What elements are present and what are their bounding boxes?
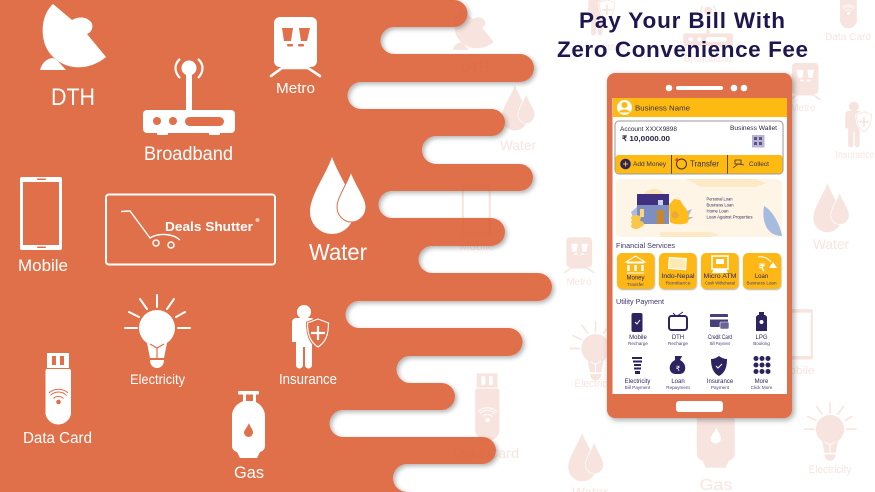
watermark: Mobile centre bbox=[460, 185, 494, 253]
Deals Shutter logo box bbox=[106, 194, 275, 264]
watermark: DTH: DTH bbox=[461, 59, 489, 76]
tile: micro ATM: Micro ATM bbox=[704, 274, 736, 280]
tile: indo-nepal remittance: Remittance bbox=[666, 280, 691, 286]
utility: insurance payment: Payment bbox=[711, 385, 730, 390]
app header bbox=[613, 98, 787, 117]
watermark: Water right bbox=[813, 183, 849, 252]
watermark: Electricity right: Electricity bbox=[808, 464, 852, 476]
title: Pay Your Bill With bbox=[579, 8, 785, 33]
coins illustration bbox=[631, 215, 644, 229]
utility: electricity bill payment bbox=[625, 357, 651, 390]
tile: money transfer bbox=[617, 253, 654, 289]
watermark: Insurance top bbox=[586, 0, 625, 53]
utility: loan repayment: Repayment bbox=[666, 385, 690, 390]
watermark: DTH bbox=[453, 9, 494, 76]
Electricity icon and label: Electricity bbox=[130, 371, 185, 387]
Broadband icon and label bbox=[143, 59, 235, 165]
utility: loan repayment: Loan bbox=[671, 379, 685, 385]
utility: DTH recharge: DTH bbox=[672, 335, 684, 341]
tile: money transfer: Transfer bbox=[627, 282, 644, 287]
utility: mobile recharge: Recharge bbox=[628, 341, 648, 346]
watermark: Data Card right bbox=[825, 0, 871, 43]
utility: LPG booking: Booking bbox=[753, 341, 770, 346]
watermark: Water lower bbox=[568, 433, 608, 492]
watermark: Data Card centre: Data Card bbox=[453, 445, 519, 461]
Mobile icon and label bbox=[18, 177, 68, 275]
QR code bbox=[752, 135, 764, 148]
watermark: Data Card right: Data Card bbox=[825, 32, 871, 43]
loan banner bbox=[616, 179, 782, 237]
phone body bbox=[607, 73, 792, 418]
Electricity icon and label bbox=[125, 295, 190, 387]
Insurance icon and label bbox=[279, 305, 337, 388]
watermark: Insurance top: Insurance bbox=[586, 42, 625, 53]
Water icon and label bbox=[309, 157, 367, 265]
watermark: Water right: Water bbox=[813, 236, 849, 252]
wallet card: ₹ 10,0000.00 bbox=[622, 134, 670, 143]
tile: micro ATM: Cash Withdrawal bbox=[705, 280, 735, 286]
Deals Shutter logo box: Deals Shutter bbox=[165, 219, 253, 234]
tile: loan: ₹ bbox=[759, 263, 766, 274]
utility: credit card bill payment: Bill Payment bbox=[710, 341, 731, 346]
wallet card: Business Wallet bbox=[730, 126, 777, 132]
Broadband icon and label: Broadband bbox=[144, 144, 233, 165]
tile: loan: Business Loan bbox=[746, 280, 777, 286]
phone speaker and camera bbox=[666, 85, 747, 91]
Insurance icon and label: Insurance bbox=[279, 372, 337, 388]
phone screen bbox=[612, 98, 787, 394]
utility: electricity bill payment: Bill Payment bbox=[625, 385, 651, 390]
financial services heading: Financial Services bbox=[616, 241, 675, 250]
phone mockup bbox=[607, 73, 792, 418]
watermark: Metro right bbox=[790, 63, 820, 114]
watermark: Data Card centre bbox=[453, 373, 519, 461]
watermark: Metro centre: Metro bbox=[566, 277, 592, 288]
utility: LPG booking: LPG bbox=[755, 335, 768, 341]
tile: indo-nepal remittance: Indo-Nepal bbox=[662, 274, 694, 280]
utility: more: More bbox=[755, 379, 769, 385]
utility: mobile recharge: Mobile bbox=[629, 335, 647, 341]
transfer button: Transfer bbox=[690, 160, 719, 168]
leaf illustration bbox=[763, 206, 782, 236]
Metro icon and label: Metro bbox=[276, 80, 315, 97]
DTH icon and label bbox=[40, 4, 106, 111]
watermark: Electricity centre bbox=[570, 322, 622, 390]
tile: loan: Loan bbox=[755, 274, 768, 280]
utility: insurance payment bbox=[707, 356, 734, 390]
utility: DTH recharge: Recharge bbox=[668, 341, 688, 346]
Water icon and label: Water bbox=[309, 239, 367, 265]
title: Zero Convenience Fee bbox=[557, 37, 808, 62]
utility: LPG booking bbox=[753, 312, 770, 346]
collect button bbox=[733, 160, 769, 168]
wallet card bbox=[615, 121, 783, 174]
watermark: Metro centre bbox=[565, 237, 594, 288]
Metro icon and label bbox=[271, 17, 320, 97]
watermark: Mobile centre: Mobile bbox=[460, 241, 494, 253]
Data Card icon and label bbox=[23, 353, 92, 447]
watermark: Insurance right bbox=[836, 102, 875, 161]
Gas icon and label bbox=[232, 391, 265, 482]
watermark: Water upper bbox=[500, 85, 536, 153]
watermark: Mobile right bbox=[780, 309, 814, 377]
orange wavy panel bbox=[0, 0, 552, 492]
collect button: Collect bbox=[749, 161, 769, 168]
house illustration bbox=[637, 194, 669, 224]
money bag illustration bbox=[669, 199, 689, 224]
tile: indo-nepal remittance bbox=[659, 253, 696, 289]
tile: money transfer: Money bbox=[626, 276, 645, 282]
add money button bbox=[620, 159, 667, 169]
transfer button bbox=[675, 158, 719, 169]
loan types list bbox=[706, 196, 752, 220]
title bbox=[557, 8, 808, 62]
utility: DTH recharge bbox=[668, 312, 688, 346]
tile: micro ATM bbox=[701, 253, 738, 289]
loan types list: Personal Loan bbox=[706, 196, 733, 202]
faded background watermark icons bbox=[453, 0, 875, 492]
utility: loan repayment bbox=[666, 356, 690, 390]
watermark: Gas bbox=[697, 391, 735, 492]
utility: mobile recharge bbox=[628, 313, 648, 346]
loan types list: Business Loan bbox=[706, 202, 734, 208]
add money button: Add Money bbox=[633, 161, 667, 168]
utility: credit card bill payment: Credit Card bbox=[708, 335, 732, 341]
phone home button bbox=[676, 401, 723, 412]
utility: loan repayment: ₹ bbox=[676, 365, 681, 373]
watermark: Mobile right: Mobile bbox=[780, 365, 814, 377]
app header: Business Name bbox=[635, 104, 690, 112]
tile: loan bbox=[743, 253, 781, 289]
watermark: Broadband top bbox=[683, 6, 733, 65]
watermark: Water upper: Water bbox=[500, 137, 536, 153]
service icons on orange panel bbox=[18, 4, 367, 482]
watermark: Broadband top: Broadband bbox=[684, 54, 732, 65]
utility: more: Click More bbox=[751, 385, 773, 390]
Mobile icon and label: Mobile bbox=[18, 256, 68, 275]
utility: more bbox=[751, 356, 773, 390]
utility: insurance payment: Insurance bbox=[707, 379, 734, 385]
DTH icon and label: DTH bbox=[51, 84, 95, 111]
loan types list: Home Loan bbox=[706, 208, 729, 214]
utility: electricity bill payment: Electricity bbox=[625, 379, 650, 385]
watermark: Metro right: Metro bbox=[790, 103, 816, 114]
watermark: Electricity centre: Electricity bbox=[574, 378, 618, 390]
wallet card: Account XXXX9898 bbox=[620, 127, 678, 133]
Gas icon and label: Gas bbox=[234, 463, 264, 482]
utility: credit card bill payment bbox=[708, 314, 732, 346]
utility payment heading: Utility Payment bbox=[616, 297, 665, 306]
Data Card icon and label: Data Card bbox=[23, 430, 92, 447]
loan types list: Loan Against Properties bbox=[706, 214, 752, 220]
watermark: Electricity right bbox=[805, 403, 856, 476]
